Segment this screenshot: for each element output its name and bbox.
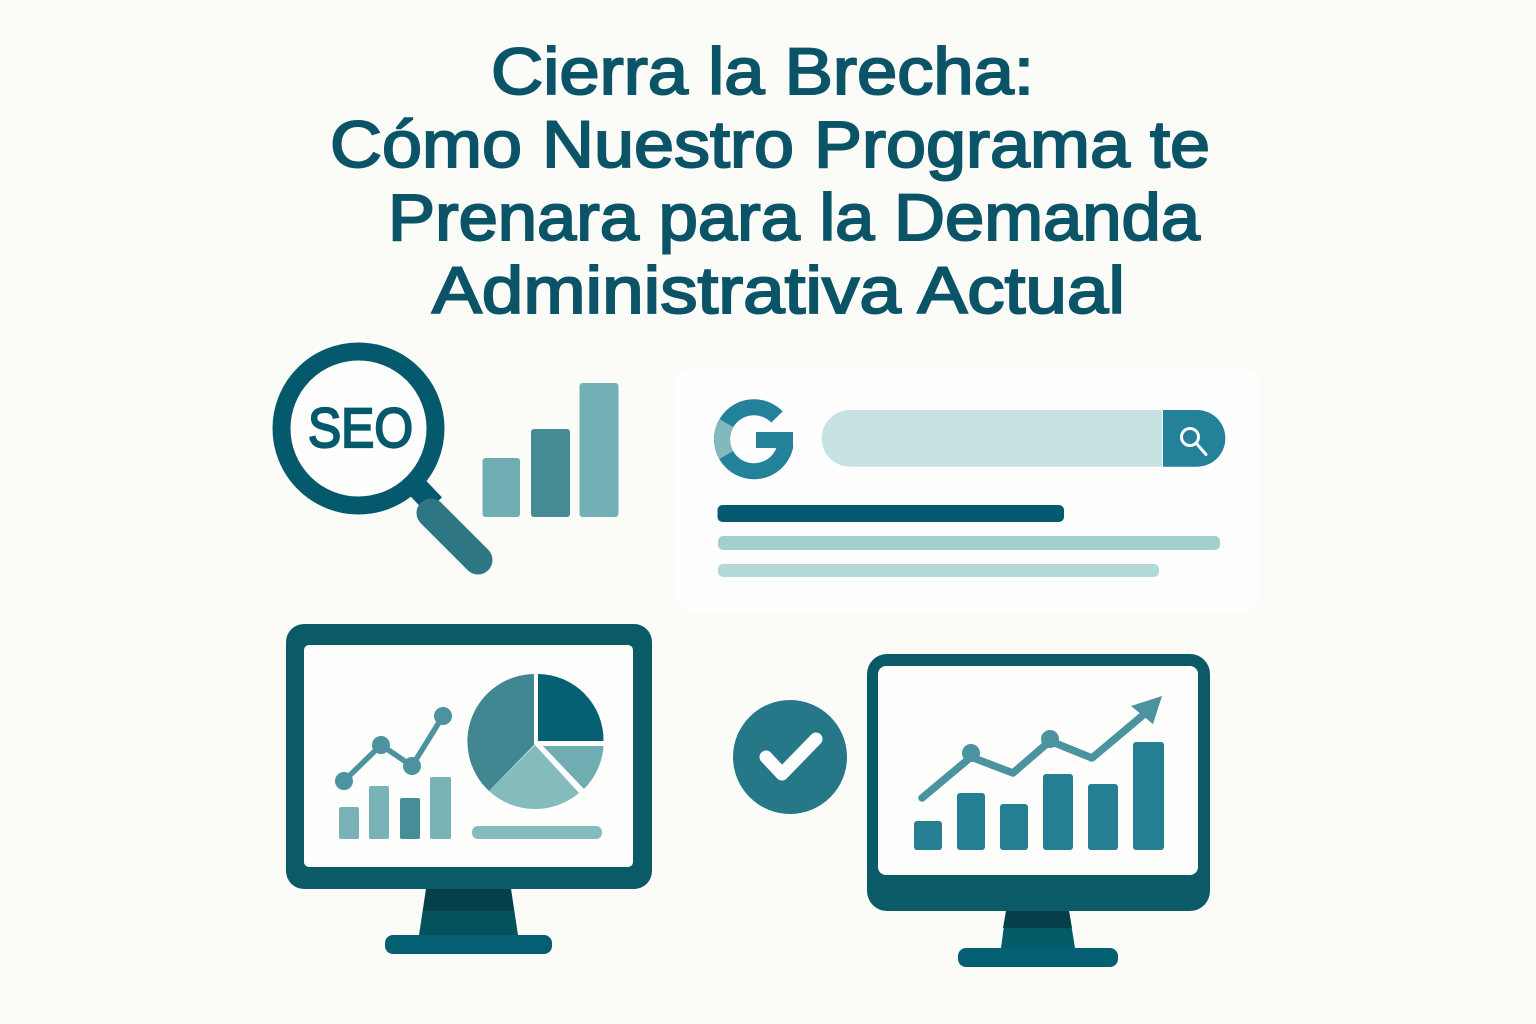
title	[330, 34, 1210, 327]
monitor stand	[385, 889, 552, 954]
trend line with arrow	[922, 696, 1162, 798]
icon: check badge	[733, 700, 847, 814]
icon: search magnifier	[1182, 428, 1206, 454]
line chart	[335, 707, 452, 790]
bar chart: SEO growth	[482, 383, 618, 517]
icon: G logo	[722, 407, 793, 471]
legend bar	[472, 826, 602, 839]
title: Cómo Nuestro Programa te	[330, 107, 1210, 181]
icon: left monitor with dashboard	[286, 624, 652, 954]
title: Cierra la Brecha:	[491, 34, 1034, 108]
bar chart	[339, 777, 451, 839]
result text line	[718, 536, 1220, 550]
icon: right monitor with growth chart	[867, 654, 1210, 967]
result title line	[718, 505, 1064, 522]
bar chart	[914, 742, 1164, 850]
title: Administrativa Actual	[432, 253, 1125, 327]
monitor stand	[958, 911, 1118, 967]
SEO label: SEO	[308, 396, 413, 459]
pie chart	[467, 674, 604, 809]
title: Prenara para la Demanda	[388, 180, 1200, 254]
panel: search results card	[675, 368, 1260, 612]
result text line	[718, 564, 1159, 577]
icon: SEO magnifying glass	[282, 352, 478, 560]
search bar	[822, 410, 1225, 467]
